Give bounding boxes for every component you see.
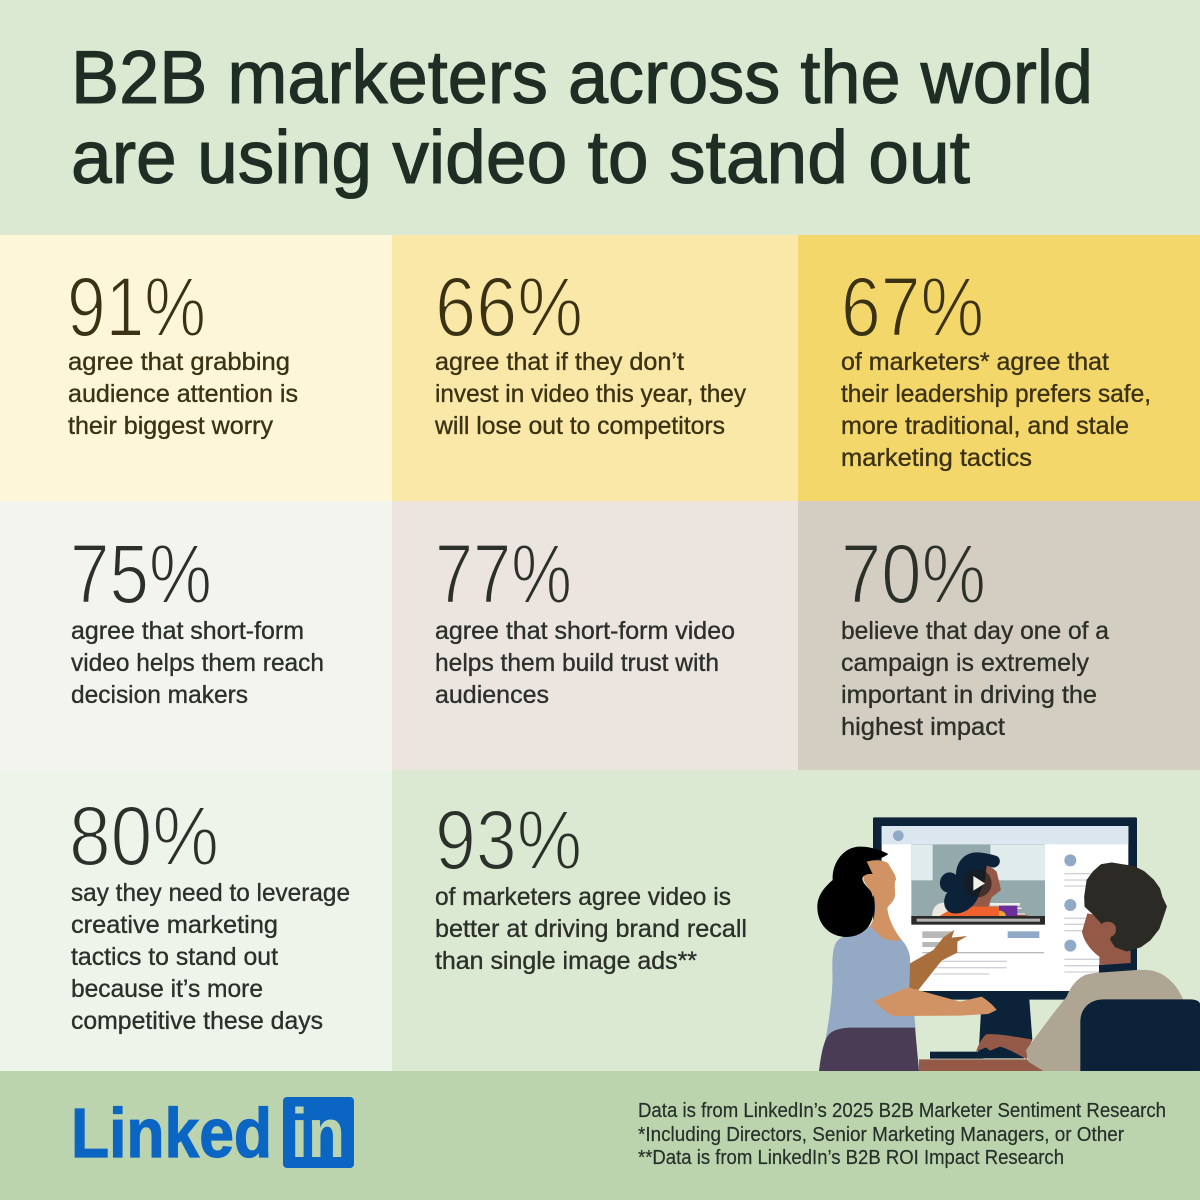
panel: 80% creative tactics: tactics to stand out	[71, 943, 278, 971]
video player	[911, 844, 1045, 925]
panel: 66% competitors: agree that if they don’t	[435, 348, 684, 376]
monitor	[873, 817, 1137, 1000]
panel: 70% day one: campaign is extremely	[841, 649, 1089, 677]
panel: 70% day one	[798, 501, 1200, 770]
panel: 67% leadership	[798, 235, 1200, 501]
desk	[919, 1059, 1043, 1071]
panel: 80% creative tactics: creative marketing	[71, 911, 278, 939]
panel: 77% trust: audiences	[435, 681, 549, 709]
footnotes: **Data is from LinkedIn’s B2B ROI Impact Research	[638, 1147, 1064, 1169]
panel: 80% creative tactics: because it’s more	[71, 975, 263, 1003]
panel: 77% trust: agree that short-form video	[435, 617, 735, 645]
panel: 67% leadership: their leadership prefers safe,	[841, 380, 1151, 408]
panel: 91% attention: 91%	[67, 260, 206, 354]
panel: 80% creative tactics: 80%	[69, 789, 219, 883]
panel: 93% brand recall: better at driving brand recall	[435, 915, 747, 943]
panel: 77% trust: helps them build trust with	[435, 649, 719, 677]
panel: 93% brand recall: of marketers agree video is	[435, 883, 731, 911]
panel: 70% day one: highest impact	[841, 713, 1005, 741]
panel: 77% trust	[392, 501, 798, 770]
LinkedIn logo: in	[291, 1094, 345, 1172]
woman pointing at the screen	[817, 847, 997, 1071]
illustration: two people watching a video on a monitor	[817, 817, 1200, 1071]
keyboard	[930, 1052, 983, 1059]
panel: 80% creative tactics: competitive these days	[71, 1007, 323, 1035]
panel: 80% creative tactics: say they need to leverage	[71, 879, 350, 907]
panel: 91% attention	[0, 235, 392, 501]
panel: 75% decision makers	[0, 501, 392, 770]
man seated at the desk	[976, 864, 1200, 1071]
panel: 70% day one: 70%	[841, 527, 986, 621]
footnotes	[638, 1100, 1166, 1169]
title: B2B marketers across the world	[71, 35, 1093, 119]
panel: 91% attention: agree that grabbing	[68, 348, 290, 376]
panel: 75% decision makers: agree that short-form	[71, 617, 304, 645]
panel: 93% brand recall: 93%	[435, 793, 582, 887]
panel: 91% attention: audience attention is	[68, 380, 298, 408]
LinkedIn logo: Linked	[71, 1094, 272, 1172]
panel: 91% attention: their biggest worry	[68, 412, 273, 440]
panel: 67% leadership: of marketers* agree that	[841, 348, 1109, 376]
panel: 75% decision makers: 75%	[70, 527, 212, 621]
footer band	[0, 1071, 1200, 1200]
panel: 67% leadership: marketing tactics	[841, 444, 1032, 472]
panel: 75% decision makers: decision makers	[71, 681, 248, 709]
panel: 70% day one: important in driving the	[841, 681, 1097, 709]
panel: 93% brand recall: than single image ads**	[435, 947, 697, 975]
panel: 66% competitors	[392, 235, 798, 501]
panel: 67% leadership: 67%	[841, 260, 984, 354]
panel: 75% decision makers: video helps them reach	[71, 649, 324, 677]
panel: 77% trust: 77%	[435, 527, 572, 621]
footnotes: Data is from LinkedIn’s 2025 B2B Marketer Sentiment Research	[638, 1100, 1166, 1122]
title: are using video to stand out	[71, 115, 970, 199]
panel: 80% creative tactics	[0, 770, 392, 1071]
panel: 67% leadership: more traditional, and stale	[841, 412, 1129, 440]
footnotes: *Including Directors, Senior Marketing Managers, or Other	[638, 1124, 1124, 1146]
title	[71, 35, 1093, 199]
panel: 70% day one: believe that day one of a	[841, 617, 1109, 645]
panel: 66% competitors: 66%	[435, 260, 583, 354]
monitor stand	[977, 999, 1032, 1058]
panel: 66% competitors: will lose out to competitors	[434, 412, 725, 440]
panel: 66% competitors: invest in video this year, they	[435, 380, 746, 408]
panel: 93% brand recall	[435, 793, 747, 975]
